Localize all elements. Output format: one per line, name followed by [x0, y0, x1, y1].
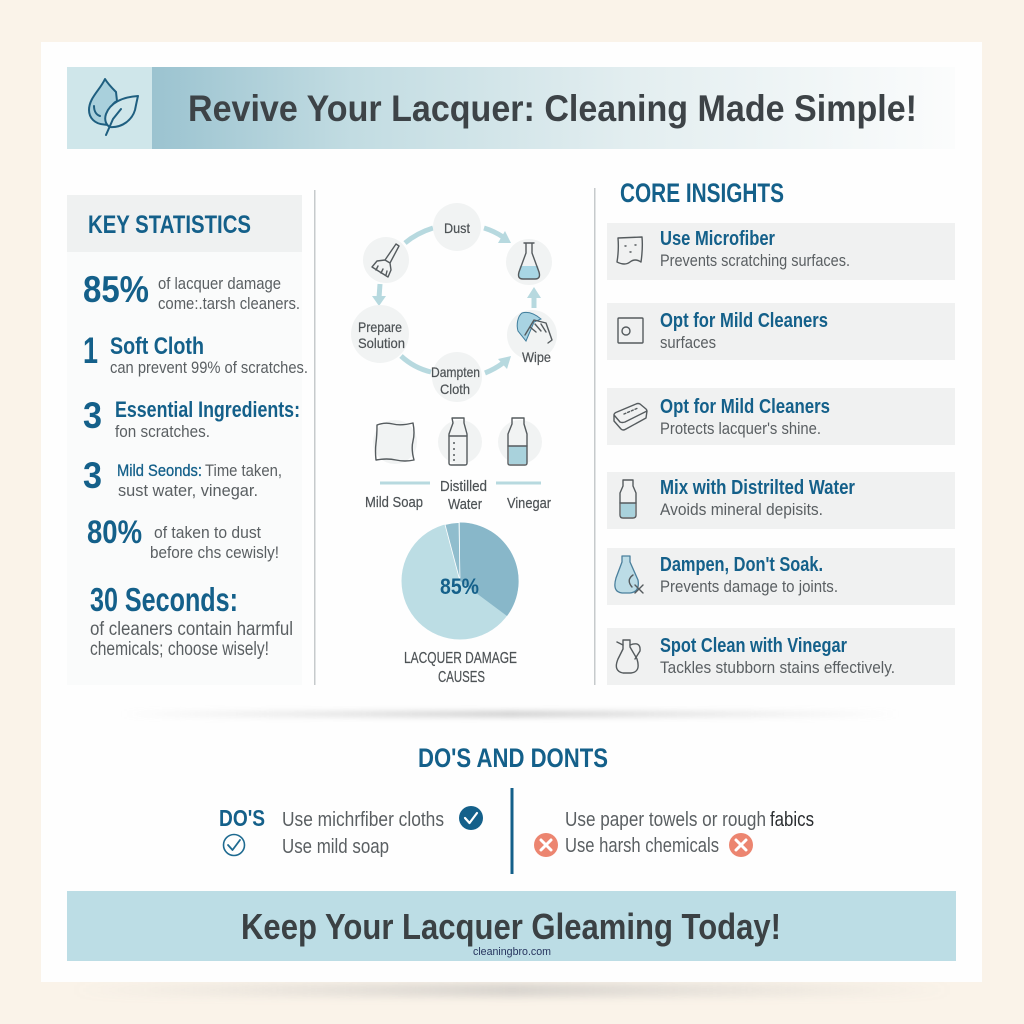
step: prepare solution: [351, 305, 409, 363]
step: dampen cloth: Dampten: [431, 364, 480, 380]
column: do's: DO'S: [219, 805, 265, 831]
cycle arrows: [372, 228, 541, 373]
insight: use microfiber: Prevents scratching surfaces.: [660, 252, 850, 270]
stat: 80 percent: 80%: [87, 514, 142, 550]
insight: spot clean with vinegar: Spot Clean with Vinegar: [660, 635, 847, 657]
column: don'ts: Use harsh chemicals: [565, 835, 719, 857]
icon: water drop and leaf: [89, 79, 138, 135]
step: wipe: Wipe: [522, 349, 551, 365]
ingredient: vinegar: [498, 418, 551, 512]
stat: 85 percent: of lacquer damage: [158, 275, 281, 293]
pie caption: LACQUER DAMAGE: [404, 650, 517, 667]
stat: soft cloth: can prevent 99% of scratches.: [110, 359, 308, 377]
card drop shadow: [70, 983, 954, 997]
insight: opt for mild cleaners shine: [607, 388, 955, 445]
stat: mild seconds: Mild Seonds:: [117, 461, 202, 480]
pie value: 85%: [440, 574, 479, 599]
step: wipe: [507, 310, 557, 365]
stat: 80 percent: [87, 514, 279, 562]
insight: dampen don't soak: Dampen, Don't Soak.: [660, 554, 823, 576]
call to action: Keep Your Lacquer Gleaming Today!: [241, 906, 781, 947]
stat: essential ingredients: [83, 395, 300, 441]
step: dust: [433, 203, 481, 251]
step: dampen cloth: [431, 352, 482, 402]
column: do's: [219, 805, 483, 858]
ingredient: distilled water: Water: [448, 497, 482, 513]
insight: mix with distilled water: Mix with Distrilted Water: [660, 477, 855, 499]
heading: do's and donts: DO'S AND DONTS: [418, 743, 608, 773]
insight: opt for mild cleaners surfaces: [607, 303, 955, 360]
column: don'ts: [534, 809, 814, 857]
insight: use microfiber: [607, 223, 955, 280]
panel: core insights: [607, 178, 955, 685]
icon tile: [67, 67, 152, 149]
insight: opt for mild cleaners shine: Protects lacquer's shine.: [660, 420, 821, 438]
cycle diagram: cleaning steps: [351, 203, 557, 402]
insight: mix with distilled water: Avoids mineral depisits.: [660, 501, 823, 519]
panel background: [67, 195, 302, 685]
panel: key statistics: [67, 195, 308, 685]
source credit: cleaningbro.com: [473, 946, 551, 958]
stat: 30 seconds: of cleaners contain harmful: [90, 619, 293, 640]
stat: mild seconds: 3: [83, 455, 102, 496]
pie small slice: [445, 522, 460, 581]
insight: opt for mild cleaners surfaces: surfaces: [660, 334, 716, 352]
insight: use microfiber: Use Microfiber: [660, 228, 775, 250]
stat: 30 seconds: chemicals; choose wisely!: [90, 639, 269, 660]
stat: soft cloth: Soft Cloth: [110, 333, 204, 360]
pie large slice: [402, 522, 518, 640]
column: do's: Use mild soap: [282, 836, 389, 858]
pie chart: lacquer damage causes: CAUSES: [438, 669, 485, 686]
footer banner: [67, 891, 956, 961]
stat: 80 percent: before chs cewisly!: [150, 544, 279, 562]
step: dust: Dust: [444, 220, 470, 236]
stat: mild seconds: Time taken,: [205, 461, 282, 480]
stat: essential ingredients: fon scratches.: [115, 423, 210, 441]
insight: opt for mild cleaners shine: Opt for Mild Cleaners: [660, 396, 830, 418]
column: don'ts: Use paper towels or rough: [565, 809, 766, 831]
stat: 30 seconds: 30 Seconds:: [90, 581, 238, 618]
stat: soft cloth: 1: [83, 330, 98, 371]
banner gradient: [152, 67, 955, 149]
insight: dampen don't soak: Prevents damage to joints.: [660, 578, 838, 596]
stat: essential ingredients: Essential Ingredients:: [115, 397, 300, 422]
step: dampen cloth: Cloth: [440, 381, 470, 397]
stat: 85 percent: [83, 269, 300, 313]
heading: key statistics: KEY STATISTICS: [88, 211, 251, 239]
icon: red cross left: [534, 833, 558, 857]
step: flask icon: [506, 239, 552, 285]
stat: essential ingredients: 3: [83, 395, 102, 436]
section: do's and don'ts: [219, 743, 814, 874]
ingredient: mild soap: [365, 420, 423, 511]
step: prepare solution: Prepare: [358, 319, 402, 335]
step: brush icon: [363, 237, 409, 283]
stat: mild seconds: sust water, vinegar.: [118, 481, 258, 500]
icon: red cross right: [729, 833, 753, 857]
stat: 85 percent: come:.tarsh cleaners.: [158, 295, 300, 313]
ingredient: mild soap: Mild Soap: [365, 495, 423, 511]
stat: 80 percent: of taken to dust: [154, 524, 261, 542]
stat: 30 seconds: [90, 581, 293, 660]
insight: spot clean with vinegar: [607, 628, 955, 685]
icon: filled check: [459, 806, 483, 830]
insight: opt for mild cleaners surfaces: Opt for Mild Cleaners: [660, 310, 828, 332]
insight: dampen don't soak: [607, 548, 955, 605]
ingredient: distilled water: Distilled: [440, 479, 487, 495]
title banner: [67, 67, 955, 149]
heading: core insights: CORE INSIGHTS: [620, 178, 784, 208]
heading band: [67, 195, 302, 252]
ingredients row: [365, 418, 551, 513]
step: prepare solution: Solution: [358, 335, 405, 351]
stat: mild seconds: [83, 455, 282, 500]
stat: soft cloth: [83, 330, 308, 377]
ingredient: distilled water: [438, 418, 487, 513]
column: don'ts: fabics: [770, 809, 814, 831]
insight: spot clean with vinegar: Tackles stubborn stains effectively.: [660, 659, 895, 677]
pie chart: lacquer damage causes: [402, 522, 519, 686]
column: do's: Use michrfiber cloths: [282, 809, 444, 831]
stat: 85 percent: 85%: [83, 269, 149, 310]
title: Revive Your Lacquer: Cleaning Made Simple!: [188, 88, 917, 129]
insight: mix with distilled water: [607, 472, 955, 529]
ingredient: vinegar: Vinegar: [507, 496, 551, 512]
pie dark slice: [460, 522, 519, 616]
icon: outline check: [224, 834, 244, 856]
